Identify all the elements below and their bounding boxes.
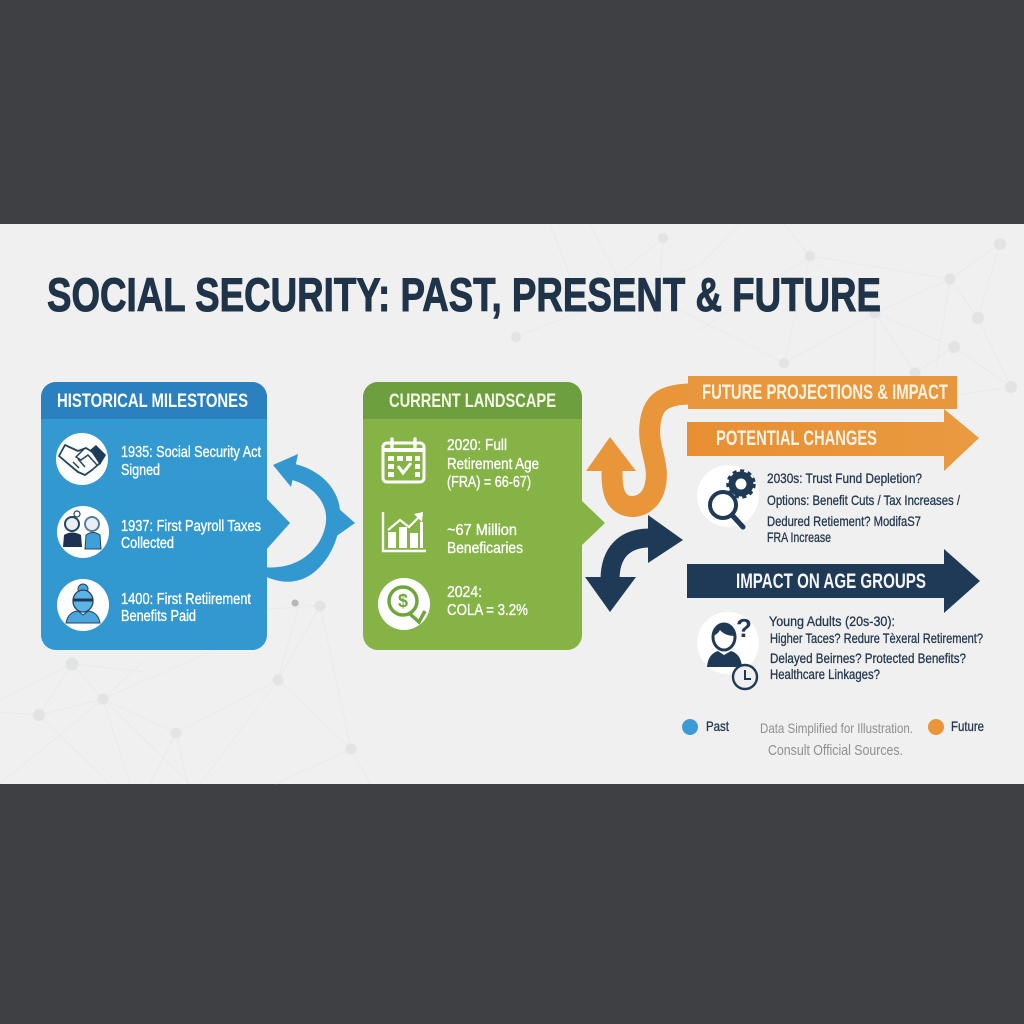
legend: future: Future [951, 718, 984, 734]
milestone 1937: Collected [121, 535, 174, 552]
network pattern: top right [511, 224, 1017, 395]
text: potential changes details: FRA Increase [767, 529, 831, 545]
icon: dollar coin [378, 578, 430, 630]
text: impact on age groups details [769, 613, 983, 682]
arrow banner: potential changes: POTENTIAL CHANGES [716, 427, 877, 450]
current fact: retirement age: 2020: Full [447, 437, 507, 454]
panel header [363, 382, 582, 419]
arrow banner: impact on age groups [687, 549, 980, 613]
milestone 1940: 1400: First Retiirement [121, 591, 252, 608]
legend: future [928, 718, 984, 735]
note: data disclaimer: Consult Official Sources. [768, 742, 903, 759]
milestone 1940 [121, 591, 252, 625]
milestone 1940: Benefits Paid [121, 608, 196, 625]
current fact: retirement age: (FRA) = 66-67) [447, 474, 531, 491]
icon: dollar coin: $ [398, 591, 408, 611]
arrow banner: potential changes [687, 409, 979, 471]
current fact: COLA [447, 584, 528, 619]
current fact: beneficiaries [447, 522, 523, 557]
arrow banner: impact on age groups: IMPACT ON AGE GROUPS [736, 570, 926, 593]
heading: current landscape: CURRENT LANDSCAPE [389, 391, 556, 412]
icon: bar chart with rising arrow [383, 512, 426, 551]
network pattern: bottom left [0, 600, 370, 784]
text: potential changes details: Dedured Retiement? ModifaS7 [767, 513, 921, 529]
text: potential changes details: 2030s: Trust Fund Depletion? [767, 470, 922, 486]
icon: magnifier and gear [697, 465, 759, 527]
current fact: COLA: 2024: [447, 584, 482, 601]
milestone 1937 [121, 518, 261, 552]
milestone 1935 [121, 444, 262, 479]
milestone 1935: 1935: Social Security Act [121, 444, 262, 461]
icon: handshake [56, 433, 108, 485]
legend: past [682, 718, 729, 735]
text: impact on age groups details: Delayed Beirnes? Protected Benefits? [770, 650, 966, 666]
panel: current landscape [363, 382, 605, 650]
icon: calendar [383, 439, 424, 482]
background panel [0, 224, 1024, 784]
arrow: navy split arrows [585, 515, 683, 612]
arrow: orange S curve [586, 394, 692, 506]
text: potential changes details: Options: Benefit Cuts / Tax Increases / [767, 492, 960, 508]
heading: historical milestones: HISTORICAL MILESTONES [57, 391, 248, 412]
panel header [41, 382, 267, 419]
arrow: blue curved loop between panels [262, 454, 355, 582]
icon: retiree with glasses [57, 579, 109, 631]
current fact: retirement age: Retirement Age [447, 456, 539, 473]
current fact: retirement age [447, 437, 539, 491]
panel: historical milestones [41, 382, 290, 650]
legend: past: Past [706, 718, 729, 734]
icon: person with question mark and clock: ? [736, 613, 752, 643]
note: data disclaimer [760, 720, 913, 759]
banner: future projections and impact [688, 376, 957, 409]
icon: person with question mark and clock [697, 612, 759, 689]
text: impact on age groups details: Healthcare Linkages? [770, 666, 880, 682]
current fact: beneficiaries: Beneficaries [447, 540, 523, 557]
milestone 1937: 1937: First Payroll Taxes [121, 518, 261, 535]
icon: elderly couple [57, 506, 109, 558]
text: impact on age groups details: Young Adults (20s-30): [769, 613, 895, 629]
text: potential changes details [767, 470, 960, 545]
current fact: COLA: COLA = 3.2% [447, 602, 528, 619]
note: data disclaimer: Data Simplified for Illustration. [760, 720, 913, 736]
milestone 1935: Signed [121, 462, 160, 479]
current fact: beneficiaries: ~67 Million [447, 522, 517, 539]
